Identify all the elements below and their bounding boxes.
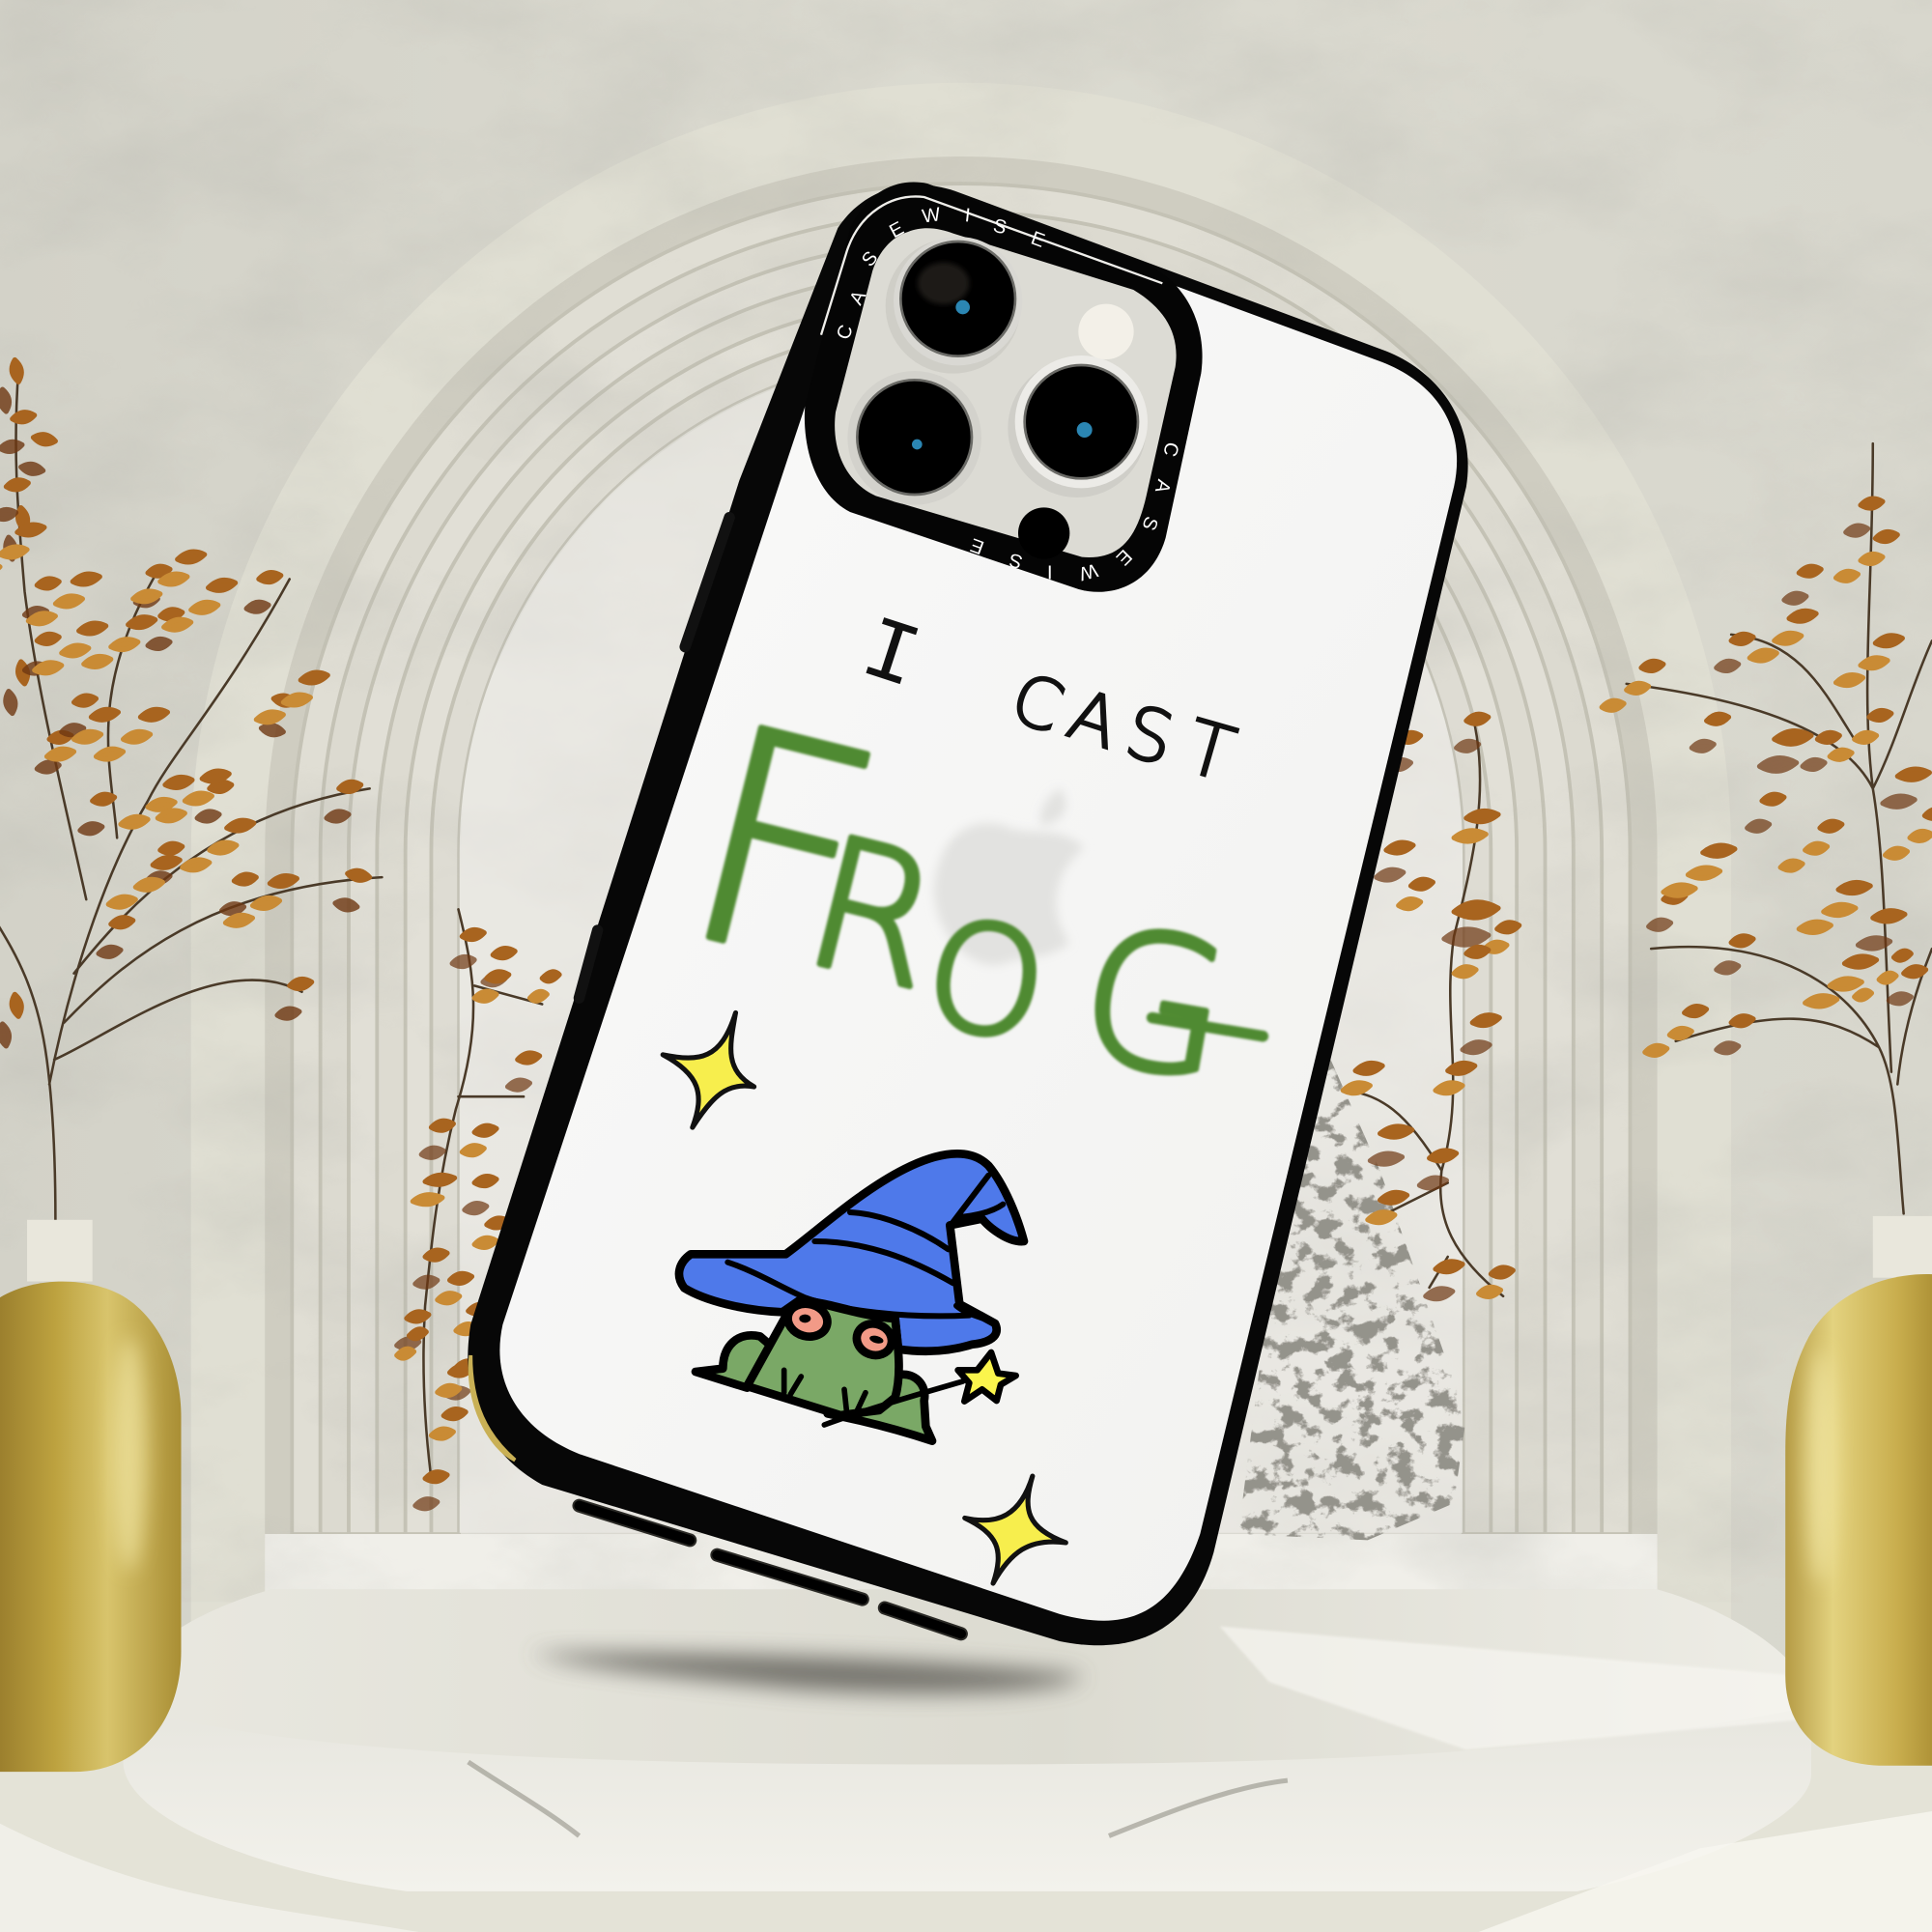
CASEWISE ring lettering: I: [1047, 561, 1052, 582]
phone shadow on platform: [529, 1653, 1084, 1693]
FROG handwriting: O: [914, 887, 1058, 1076]
white sliver ring: [821, 196, 1162, 335]
lower right lens: [1008, 355, 1148, 497]
FROG handwriting: R: [788, 797, 959, 1030]
black sensor dot: [1018, 507, 1069, 559]
bump black frame: [805, 183, 1203, 592]
frog head: [747, 1299, 899, 1415]
CASEWISE ring lettering: E: [1028, 228, 1047, 252]
plant: centre left and centre right: [397, 714, 1520, 1509]
CASEWISE ring lettering: E: [968, 533, 987, 558]
wand star: [958, 1352, 1016, 1402]
toes: [784, 1370, 866, 1413]
back leg right: [828, 1375, 932, 1441]
right gold vase: [1785, 1216, 1932, 1766]
CASEWISE ring lettering: E: [886, 217, 907, 242]
FROG handwriting: [657, 663, 1263, 1123]
CASEWISE ring lettering: C: [1158, 440, 1182, 459]
I CAST handwriting: I: [849, 601, 931, 713]
right eye: [852, 1319, 896, 1360]
case outer body: [468, 185, 1468, 1645]
CASEWISE ring lettering: W: [1077, 559, 1100, 584]
wizard frog illustration, drawn in zoom units: [679, 1153, 1024, 1441]
back leg left: [696, 1335, 782, 1388]
wand: [824, 1381, 963, 1425]
hat: [679, 1153, 1024, 1351]
case white back panel: [499, 205, 1457, 1621]
CASEWISE ring lettering: S: [1007, 549, 1025, 572]
top lens: [886, 237, 1022, 374]
phone case: [468, 185, 1468, 1645]
sparkle top: [663, 1012, 754, 1127]
niche opening brightening: [461, 353, 1462, 1534]
I CAST handwriting: [849, 601, 1243, 799]
CASEWISE ring lettering: A: [845, 287, 870, 308]
lower left lens: [847, 371, 981, 505]
camera bump, drawn in zoom units: [805, 183, 1203, 592]
CASEWISE ring lettering: I: [964, 205, 972, 227]
left pupil: [799, 1315, 810, 1322]
stone arch niche: [191, 83, 1731, 1658]
right pupil: [868, 1334, 884, 1345]
CASEWISE ring lettering: [833, 204, 1182, 584]
FROG handwriting: F: [657, 663, 905, 1037]
CASEWISE ring lettering: A: [1151, 477, 1175, 496]
CASEWISE ring lettering: S: [991, 215, 1009, 239]
apple logo ghost: [934, 788, 1084, 965]
camera plate: [835, 228, 1177, 557]
I CAST handwriting: S: [1118, 691, 1181, 781]
plant: far right: [1602, 443, 1932, 1213]
side reflection: [470, 1355, 515, 1460]
CASEWISE ring lettering: S: [1137, 513, 1162, 533]
plant: far left: [0, 359, 382, 1220]
flash: [1078, 304, 1134, 359]
sparkle bottom: [965, 1476, 1065, 1583]
stone platform: [0, 1589, 1932, 1932]
FROG handwriting: G: [1065, 886, 1243, 1123]
left eye: [784, 1299, 831, 1341]
I CAST handwriting: T: [1177, 704, 1243, 799]
I CAST handwriting: C: [1001, 657, 1073, 750]
CASEWISE ring lettering: W: [921, 204, 942, 228]
side buttons: [579, 518, 729, 998]
CASEWISE ring lettering: S: [858, 247, 882, 271]
CASEWISE ring lettering: C: [833, 322, 858, 343]
bottom ports: [579, 1506, 961, 1634]
left gold vase: [0, 1220, 181, 1772]
CASEWISE ring lettering: E: [1112, 545, 1136, 569]
I CAST handwriting: A: [1059, 674, 1128, 765]
hat bands: [727, 1176, 1003, 1321]
marble veins on niche wall: [1238, 1060, 1466, 1540]
